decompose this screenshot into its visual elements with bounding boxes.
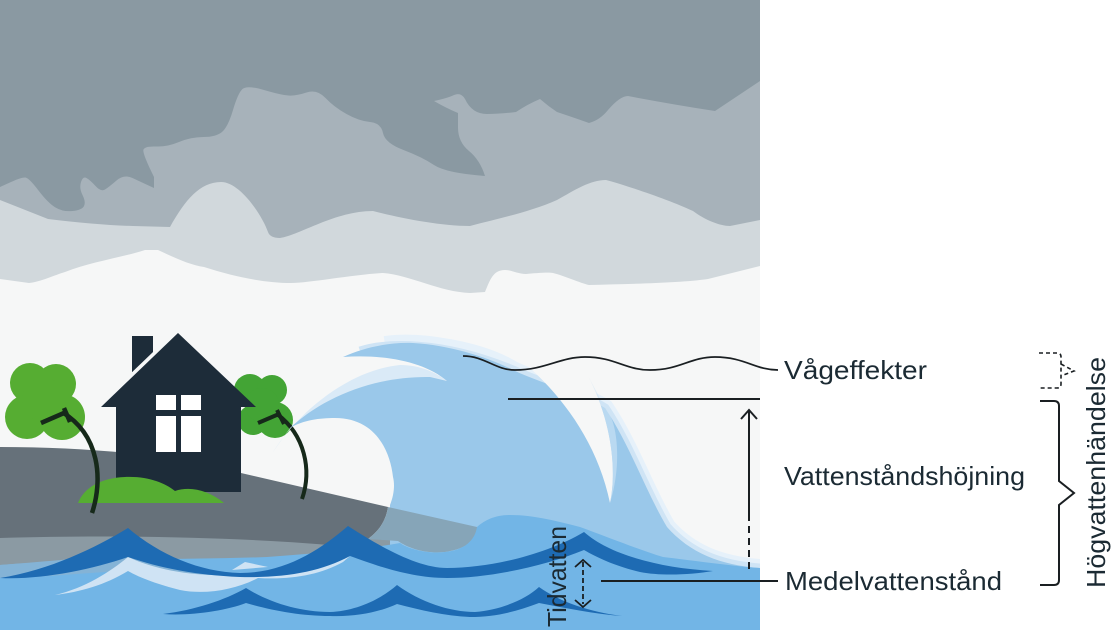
label: tide: Tidvatten (542, 526, 572, 627)
house (101, 328, 256, 492)
wave: main body (290, 342, 759, 568)
line: wave effects level (463, 356, 778, 370)
water: dark wave two (163, 585, 622, 617)
illustration: storm surge wave (275, 334, 760, 568)
wave: pale swoosh band (273, 365, 447, 452)
tree: right crown (234, 374, 293, 438)
label: water level rise: Vattenståndshöjning (784, 461, 1025, 491)
label: mean water level: Medelvattenstånd (785, 566, 1002, 596)
line: raised water level (508, 398, 760, 400)
bracket: dashed wave effects (1039, 353, 1074, 388)
cloud: mid layer (0, 81, 760, 238)
illustration: water (0, 515, 760, 630)
panel: storm clouds (0, 0, 760, 293)
wave: inner foam halo (360, 346, 760, 568)
arrow: water level rise (741, 410, 757, 569)
panel: illustration background (0, 0, 760, 630)
ground: submerged shore band (0, 535, 410, 575)
water: pale patch (232, 562, 268, 570)
bush (78, 477, 224, 503)
water: muted shallow band (0, 552, 240, 578)
tree: left crown (5, 363, 85, 440)
ground: rocky hillside (0, 447, 388, 560)
arrow: tide range (575, 560, 591, 607)
house roof gap (126, 328, 190, 390)
cloud: dark layer (0, 0, 760, 211)
house windows (156, 395, 201, 452)
bracket: high water event (1040, 401, 1074, 585)
wave: outer foam halo (385, 344, 760, 568)
label: wave effects: Vågeffekter (784, 355, 927, 385)
wave: slash foam (591, 382, 618, 500)
water: dark wave one (0, 526, 713, 578)
tree: left trunk (41, 408, 98, 513)
wave: crest slash (530, 362, 613, 503)
water: pale wave crest (55, 556, 350, 595)
tree: right trunk (258, 410, 306, 499)
line: mean water level (601, 580, 778, 582)
water: main surface (0, 515, 760, 630)
house chimney (132, 336, 153, 372)
ground seen through wave (368, 507, 477, 552)
illustration: coast with house and trees (0, 328, 410, 575)
label: high water event: Högvattenhändelse (1081, 357, 1111, 588)
house body (101, 333, 256, 492)
cloud: light layer (0, 180, 760, 293)
